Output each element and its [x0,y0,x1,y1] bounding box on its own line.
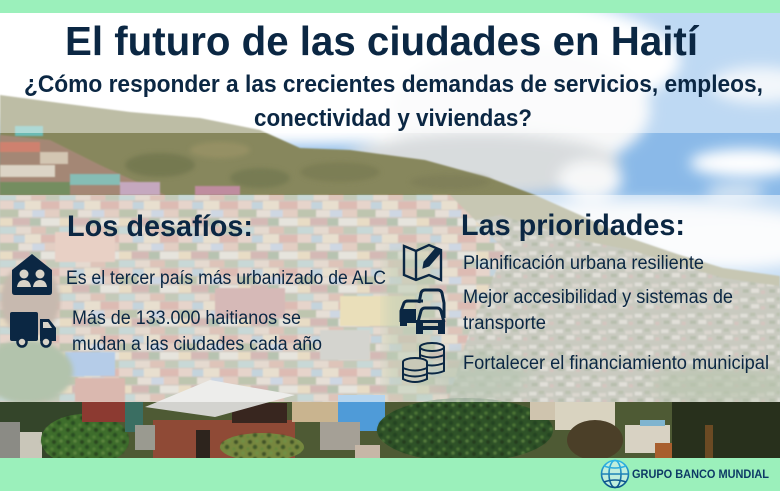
logo wordmark: GRUPO BANCO MUNDIAL [632,469,769,481]
text: urbanización: Es el tercer país más urbanizado de ALC [66,268,386,289]
icon: cars [400,290,445,334]
logo: Grupo Banco Mundial [602,460,769,488]
text: migración: Más de 133.000 haitianos se [72,308,301,329]
text: accesibilidad [463,287,733,334]
translucent panel: content [0,195,780,402]
icon: map and pencil [404,245,441,280]
icon: house with people [12,254,52,295]
panel: los desafíos [10,210,386,355]
text: accesibilidad: transporte [463,313,546,334]
translucent band: title [0,13,780,133]
text: accesibilidad: Mejor accesibilidad y sistemas de [463,287,733,308]
panel: las prioridades [400,209,769,382]
icon: coins [403,343,444,382]
text: migración: mudan a las ciudades cada año [72,334,322,355]
subtitle: conectividad y viviendas? [254,105,532,132]
text: financiamiento: Fortalecer el financiamiento municipal [463,353,769,374]
text: migración [72,308,322,355]
translucent band: light strip [0,133,780,195]
subtitle [24,71,763,132]
icon: truck [10,312,56,346]
bottom band [0,458,780,491]
title: El futuro de las ciudades en Haití [65,18,700,64]
icon: globe [602,460,628,488]
heading: las prioridades: Las prioridades: [461,209,685,242]
top band [0,0,780,13]
text: planificación: Planificación urbana resiliente [463,253,704,274]
foreground buildings and trees [0,380,780,466]
heading: los desafíos: Los desafíos: [67,210,253,243]
